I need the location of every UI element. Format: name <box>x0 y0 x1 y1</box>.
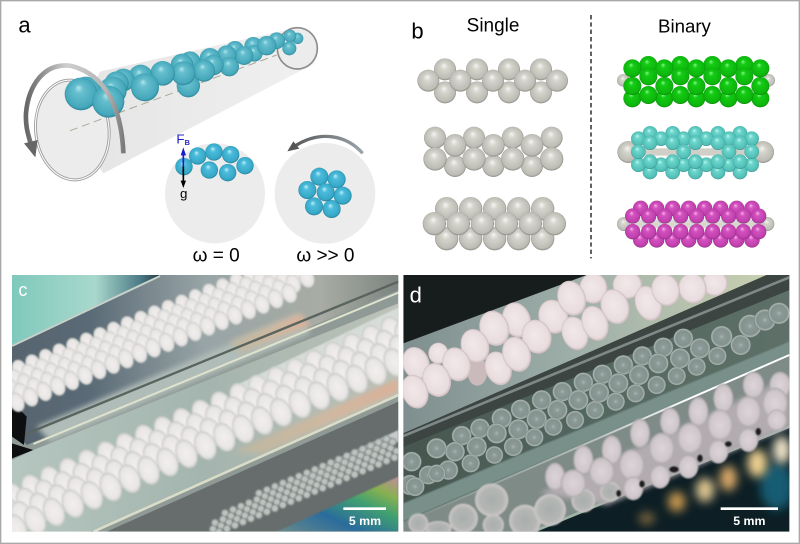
cross-section omega zero: F <box>176 131 184 146</box>
cross-section omega zero: B <box>185 138 190 147</box>
rotation arrow <box>24 66 123 157</box>
cross-section omega zero: g <box>180 186 187 201</box>
tube far end <box>277 28 317 69</box>
middle tube <box>12 303 398 532</box>
label omega >> 0: ω >> 0 <box>296 246 354 267</box>
label c: c <box>18 280 27 300</box>
heading binary: Binary <box>658 16 712 37</box>
translucent beads middle tube <box>400 302 790 496</box>
lower tube <box>107 402 398 532</box>
label d: d <box>410 282 422 307</box>
panel a: rotating tube schematic <box>18 12 375 267</box>
spheres in tube <box>65 30 303 118</box>
label b: b <box>411 18 424 43</box>
single structure 3 <box>423 197 566 250</box>
divider <box>588 15 594 258</box>
binary structure green <box>617 56 775 107</box>
pink beads upper tube <box>397 267 731 412</box>
panel b: packing structures <box>411 15 775 258</box>
binary structure magenta <box>617 201 774 248</box>
tube axis <box>70 55 277 131</box>
rotation arrow small <box>287 136 363 153</box>
hazy band lower tube <box>540 377 789 505</box>
scale label c: 5 mm <box>349 514 381 528</box>
beads middle tube <box>12 317 398 532</box>
tube near end <box>31 76 114 184</box>
cross-section omega much greater than zero <box>275 143 375 244</box>
label a: a <box>18 12 31 37</box>
lower tube <box>403 355 793 532</box>
label omega = 0: ω = 0 <box>193 246 240 267</box>
binary structure teal <box>617 126 774 179</box>
panel d: photo of binary sphere packings <box>397 267 793 537</box>
scale bar c <box>343 507 386 510</box>
middle tube <box>403 290 789 522</box>
white beads lower tube <box>545 372 791 500</box>
scale label d: 5 mm <box>733 514 765 528</box>
single structure 1 <box>417 58 568 103</box>
discs lower tube <box>408 482 620 537</box>
beads upper tube <box>12 275 315 414</box>
heading single: Single <box>467 16 519 37</box>
single structure 2 <box>423 127 563 177</box>
upper tube <box>12 275 398 458</box>
upper tube <box>403 275 789 447</box>
dark gaps lower tube <box>616 428 761 497</box>
panel c: photo of single sphere packings <box>12 275 398 532</box>
tube body <box>72 28 315 173</box>
beads lower tube <box>208 435 398 532</box>
cross-section omega zero <box>165 131 265 243</box>
scale bar d <box>721 507 778 510</box>
